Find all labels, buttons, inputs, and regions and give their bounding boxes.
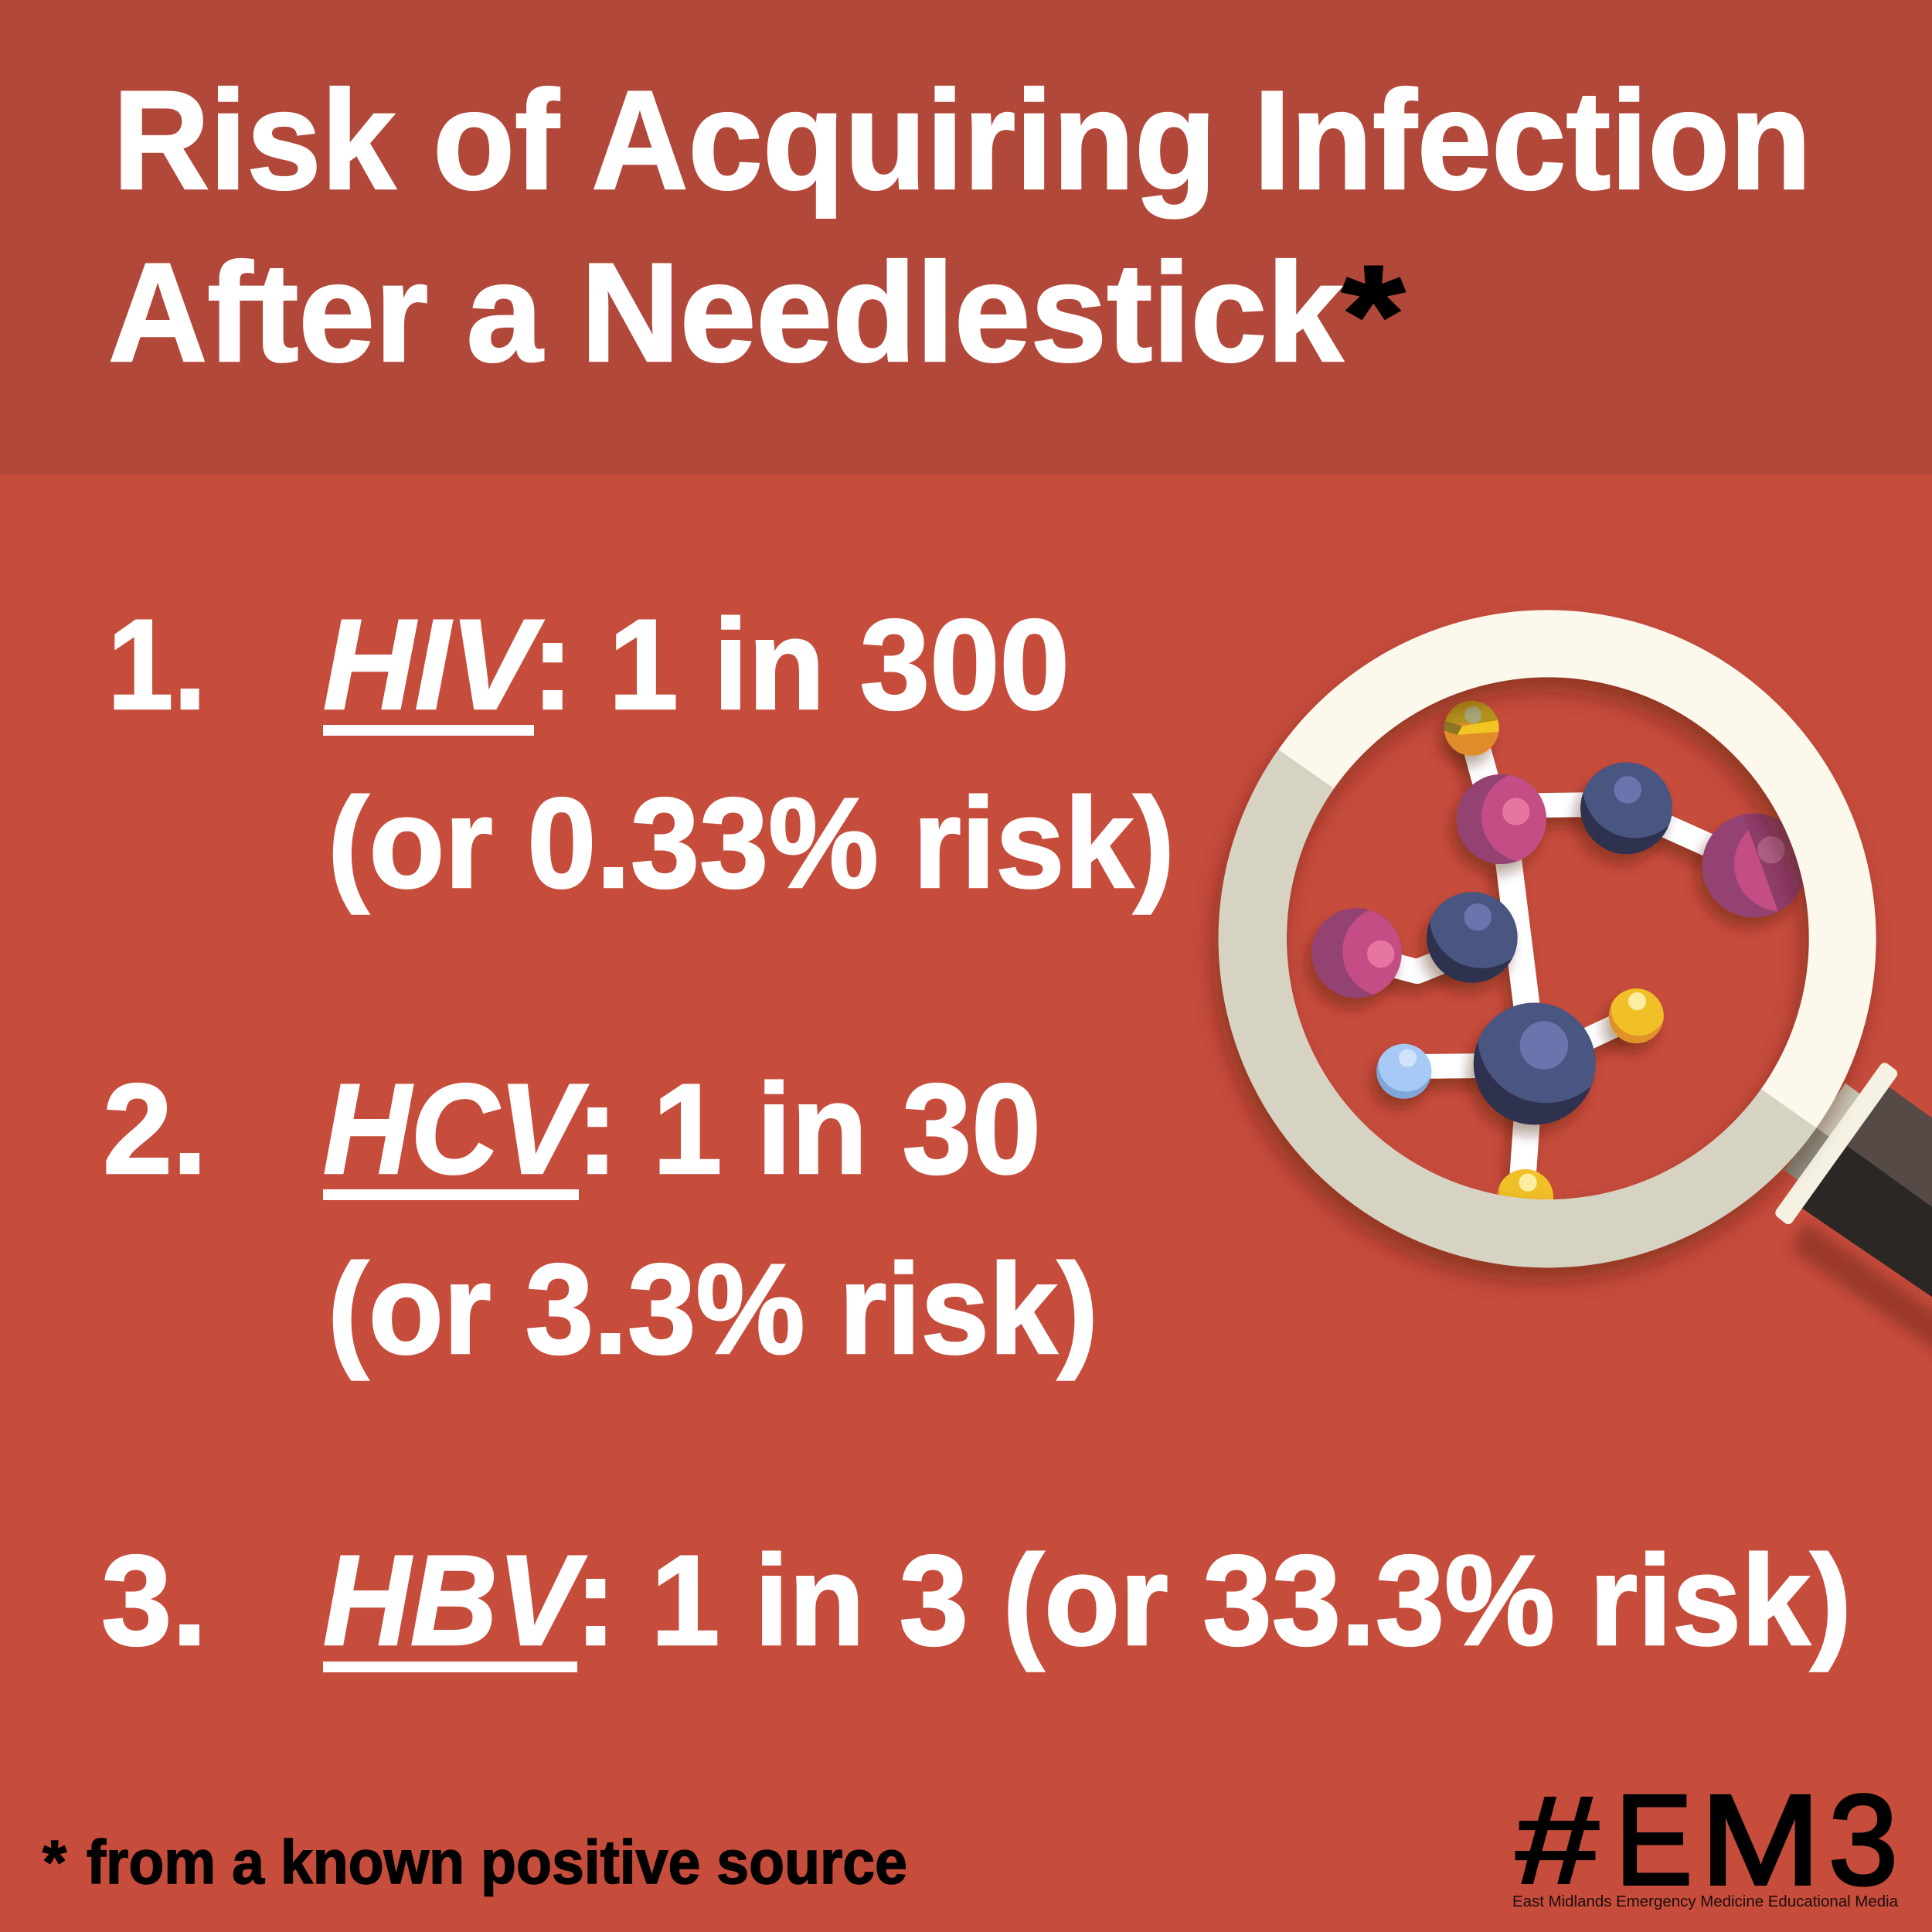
- list item 1: HIV: [107, 594, 1175, 915]
- list item 3: HBV: HBV: [323, 1529, 587, 1672]
- atom: navy large: [1461, 1003, 1596, 1143]
- logo: #EM3: 3: [1828, 1769, 1898, 1912]
- header band: [0, 0, 1932, 474]
- title: [108, 61, 1811, 393]
- bonds: [1381, 747, 1713, 1188]
- logo tagline: East Midlands Emergency Medicine Educational Media: [1512, 1893, 1899, 1910]
- list item 1: HIV: HIV: [323, 594, 544, 736]
- list item 3: HBV: 3.: [101, 1529, 207, 1672]
- magnifier ring: [1219, 610, 1876, 1267]
- atom: pink upper: [1457, 771, 1573, 864]
- atom: pink right: [1702, 810, 1828, 923]
- magnifier collar: [1781, 1068, 1893, 1219]
- atom: pink left: [1311, 906, 1434, 998]
- list item 2: HCV: (or 3.3% risk): [328, 1238, 1098, 1381]
- handle shadow: [1791, 1221, 1932, 1392]
- atom: navy left: [1414, 892, 1519, 998]
- list item 3: HBV: : 1 in 3 (or 33.3% risk): [575, 1529, 1852, 1672]
- title: After a Needlestick: [108, 233, 1344, 391]
- molecule: [1311, 699, 1828, 1226]
- atom: navy upper: [1567, 762, 1674, 870]
- logo: #EM3: E: [1615, 1769, 1692, 1912]
- atom: top yellow: [1440, 699, 1502, 756]
- footnote: from a known positive source: [87, 1828, 907, 1896]
- list item 2: HCV: 2.: [103, 1058, 207, 1201]
- title: Risk of Acquiring Infection: [113, 61, 1811, 219]
- logo: #EM3: M: [1700, 1769, 1821, 1912]
- list item 1: HIV: : 1 in 300: [532, 594, 1070, 736]
- magnifier neck: [1784, 1083, 1863, 1182]
- logo: #EM3: #: [1512, 1769, 1602, 1912]
- atom: yellow bottom: [1497, 1169, 1553, 1199]
- list item 2: HCV: : 1 in 30: [577, 1058, 1041, 1201]
- list item 1: HIV: (or 0.33% risk): [328, 772, 1175, 915]
- title: *: [1342, 236, 1405, 393]
- list item 2: HCV: HCV: [323, 1058, 589, 1201]
- list item 1: HIV: 1.: [107, 594, 206, 736]
- list item 2: HCV: [103, 1058, 1098, 1381]
- atom: blue: [1376, 1037, 1434, 1099]
- atom: yellow right: [1609, 981, 1666, 1043]
- footnote: *: [43, 1828, 83, 1896]
- logo: #EM3: [1512, 1769, 1899, 1912]
- magnifier handle: [1794, 1081, 1932, 1372]
- icon: magnifying glass with molecule: [1219, 610, 1932, 1392]
